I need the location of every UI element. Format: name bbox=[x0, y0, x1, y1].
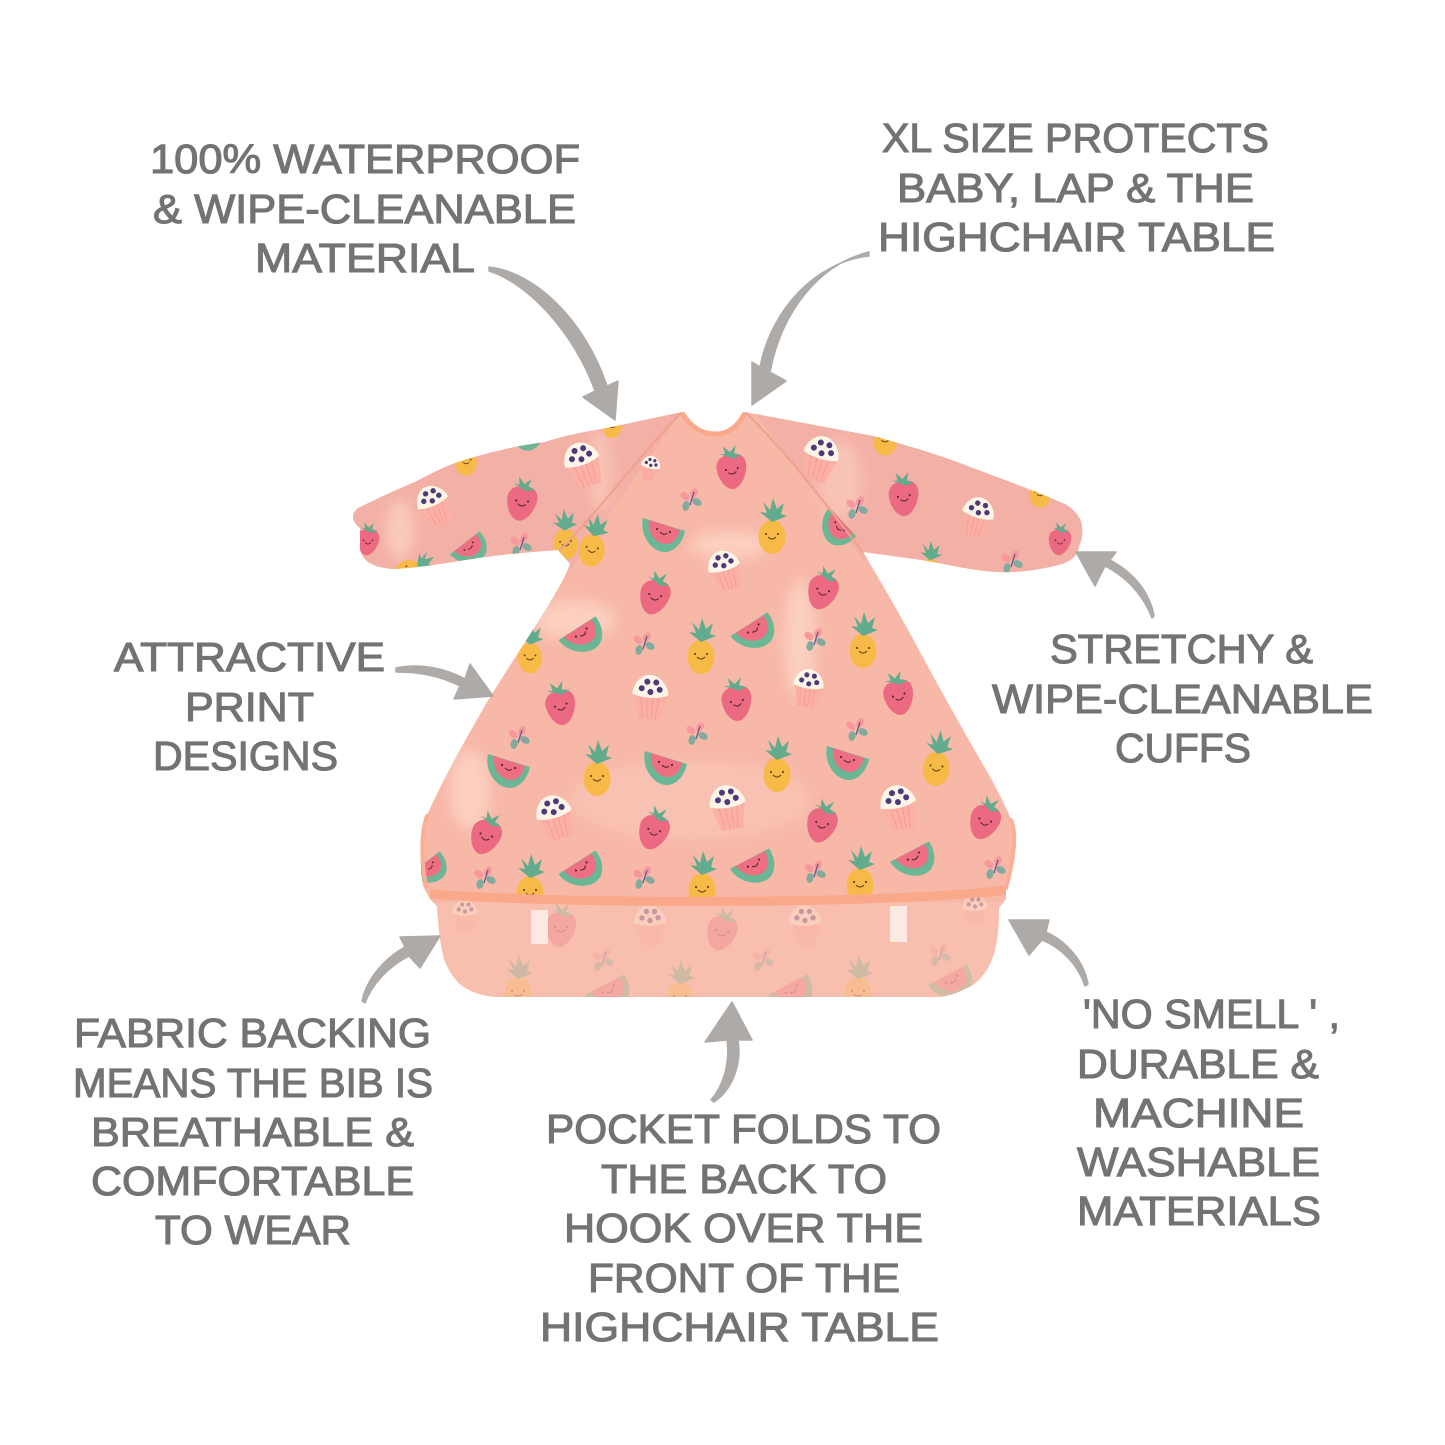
text: no smell bbox=[1077, 991, 1340, 1234]
text: xl size: BABY, LAP & THE bbox=[897, 165, 1254, 211]
text: fabric backing bbox=[73, 1010, 433, 1253]
text: print designs: DESIGNS bbox=[153, 733, 338, 779]
text: no smell: DURABLE & bbox=[1077, 1041, 1319, 1087]
text: xl size bbox=[878, 115, 1275, 260]
bib base shape bbox=[340, 399, 1100, 1019]
text: cuffs bbox=[992, 626, 1373, 771]
text: no smell: MATERIALS bbox=[1077, 1188, 1321, 1234]
text: no smell: WASHABLE bbox=[1077, 1139, 1320, 1185]
arrow: xl size bbox=[752, 252, 869, 405]
text: waterproof bbox=[150, 136, 580, 281]
text: fabric backing: MEANS THE BIB IS bbox=[73, 1060, 433, 1106]
strawberries bbox=[357, 443, 1071, 858]
side binding bbox=[422, 816, 1014, 888]
text: fabric backing: FABRIC BACKING bbox=[74, 1010, 431, 1056]
text: print designs: ATTRACTIVE bbox=[114, 634, 385, 680]
text: fabric backing: BREATHABLE & bbox=[91, 1109, 414, 1155]
pocket bbox=[433, 897, 1004, 997]
bib illustration bbox=[340, 399, 1100, 1019]
arrow: cuffs bbox=[1076, 552, 1154, 618]
text: xl size: HIGHCHAIR TABLE bbox=[878, 214, 1275, 260]
text: print designs: PRINT bbox=[185, 684, 314, 730]
neck binding bbox=[682, 413, 745, 434]
text: cuffs: CUFFS bbox=[1115, 725, 1251, 771]
text: pocket bbox=[540, 1106, 941, 1350]
text: pocket: HIGHCHAIR TABLE bbox=[540, 1304, 939, 1350]
text: xl size: XL SIZE PROTECTS bbox=[882, 115, 1269, 161]
cupcakes bbox=[412, 431, 999, 844]
text: waterproof: 100% WATERPROOF bbox=[150, 136, 580, 182]
text: waterproof: & WIPE-CLEANABLE bbox=[153, 186, 576, 232]
butterflies bbox=[473, 487, 1024, 890]
arrow: no smell bbox=[1009, 920, 1088, 986]
watermelons bbox=[410, 423, 944, 897]
text: pocket: THE BACK TO bbox=[601, 1156, 887, 1202]
text: no smell: MACHINE bbox=[1093, 1090, 1304, 1136]
text: pocket: FRONT OF THE bbox=[588, 1255, 900, 1301]
arrow: fabric backing bbox=[362, 936, 440, 1003]
text: pocket: HOOK OVER THE bbox=[564, 1205, 923, 1251]
arrow: waterproof bbox=[489, 267, 618, 420]
sleeve seams bbox=[558, 412, 682, 552]
text: waterproof: MATERIAL bbox=[255, 235, 475, 281]
arrow: print bbox=[396, 664, 493, 699]
arrow: pocket bbox=[705, 1002, 752, 1102]
text: pocket: POCKET FOLDS TO bbox=[546, 1106, 941, 1152]
text: no smell: 'NO SMELL ' , bbox=[1083, 991, 1340, 1037]
pineapples bbox=[390, 399, 1052, 910]
text: fabric backing: TO WEAR bbox=[155, 1207, 351, 1253]
text: cuffs: STRETCHY & bbox=[1050, 626, 1313, 672]
pocket seam binding bbox=[430, 890, 1008, 901]
text: print designs bbox=[114, 634, 385, 779]
text: fabric backing: COMFORTABLE bbox=[91, 1158, 414, 1204]
text: cuffs: WIPE-CLEANABLE bbox=[992, 676, 1373, 722]
